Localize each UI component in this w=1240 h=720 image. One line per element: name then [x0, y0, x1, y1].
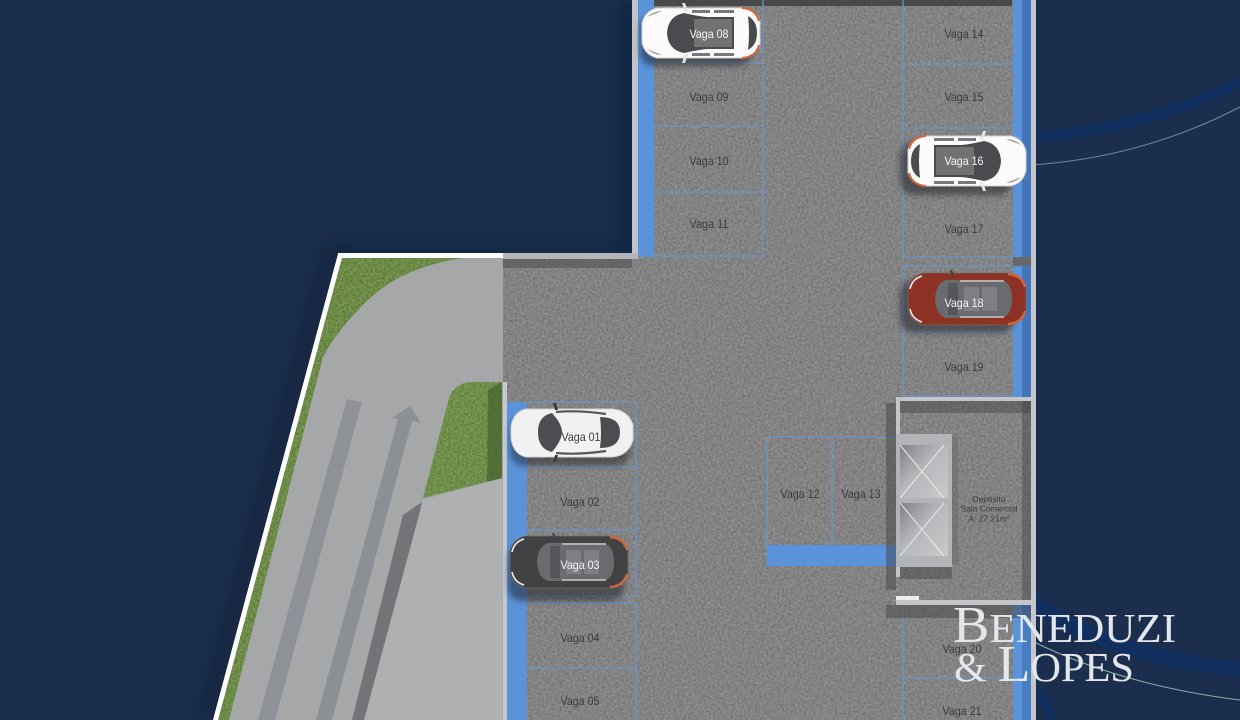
- asphalt floor: [213, 0, 1036, 720]
- bay labels: upper left: Vaga 09: [690, 90, 729, 104]
- blue strip: spaces 12 and 13: [767, 545, 896, 566]
- car: space 03: [508, 533, 628, 601]
- bay labels: lower left: [560, 430, 601, 708]
- bay labels: right side: Vaga 14: [944, 27, 984, 41]
- logo: Beneduzi & Lopes: [953, 597, 1176, 693]
- ramp surface: [213, 254, 503, 720]
- blue strip: right side: [1013, 0, 1031, 720]
- bay labels: right side: Vaga 18: [944, 296, 984, 310]
- bay labels: upper left: Vaga 11: [690, 217, 729, 231]
- bay labels: right side: Vaga 20: [942, 642, 982, 656]
- blue strip: lower left: [507, 402, 527, 720]
- shadow under upper wall: [503, 259, 632, 268]
- background curves top right: [1030, 82, 1240, 165]
- structural walls: [213, 0, 1036, 720]
- ramp lane stripe: [258, 399, 362, 720]
- lower ramp block shadow: [352, 502, 422, 720]
- ramp direction arrow: [316, 406, 421, 720]
- blue strip: upper left: [636, 0, 654, 257]
- top edge shadow: [654, 0, 1012, 6]
- bay labels: lower left: Vaga 04: [560, 631, 600, 645]
- bay labels: lower left: Vaga 05: [560, 694, 600, 708]
- bay labels: upper left: Vaga 10: [690, 154, 729, 168]
- car: space 08: [640, 3, 760, 66]
- bay labels: centre: Vaga 12: [780, 487, 820, 501]
- garden strip along ramp: [218, 258, 462, 720]
- bay labels: lower left: Vaga 03: [560, 558, 600, 572]
- bay labels: right side: Vaga 19: [944, 360, 984, 374]
- door: [896, 596, 919, 600]
- storage room label: Depósito: [972, 494, 1006, 504]
- bay labels: upper left: [690, 27, 729, 231]
- car: space 18: [900, 270, 1026, 333]
- bay labels: right side: Vaga 15: [944, 90, 984, 104]
- bay labels: lower left: Vaga 02: [560, 495, 600, 509]
- elevator block: [896, 434, 952, 567]
- storage room label: Sala Comercial: [961, 504, 1018, 514]
- storage room label: [961, 494, 1018, 524]
- bay labels: upper left: Vaga 08: [690, 27, 729, 41]
- bay labels: centre: Vaga 13: [842, 487, 881, 501]
- car: space 16: [900, 131, 1026, 195]
- storage room label: A: 27,21m²: [969, 514, 1010, 524]
- background curves bottom right: [1030, 598, 1240, 720]
- bay labels: lower left: Vaga 01: [562, 430, 601, 444]
- logo: Beneduzi & Lopes: BENEDUZI: [953, 597, 1176, 654]
- storage room: [886, 397, 1031, 618]
- bay labels: right side: Vaga 17: [944, 222, 984, 236]
- bay labels: right side: Vaga 16: [944, 154, 984, 168]
- building outer shadow: [200, 0, 632, 720]
- logo: Beneduzi & Lopes: & LOPES: [954, 636, 1134, 693]
- island garden: [423, 382, 502, 498]
- bay labels: right side: Vaga 21: [942, 704, 982, 718]
- bay labels: centre: [780, 487, 881, 501]
- car: space 01: [510, 403, 633, 466]
- lower ramp block: [364, 478, 503, 720]
- bay labels: right side: [942, 27, 984, 718]
- parking bay lines: [527, 0, 1013, 720]
